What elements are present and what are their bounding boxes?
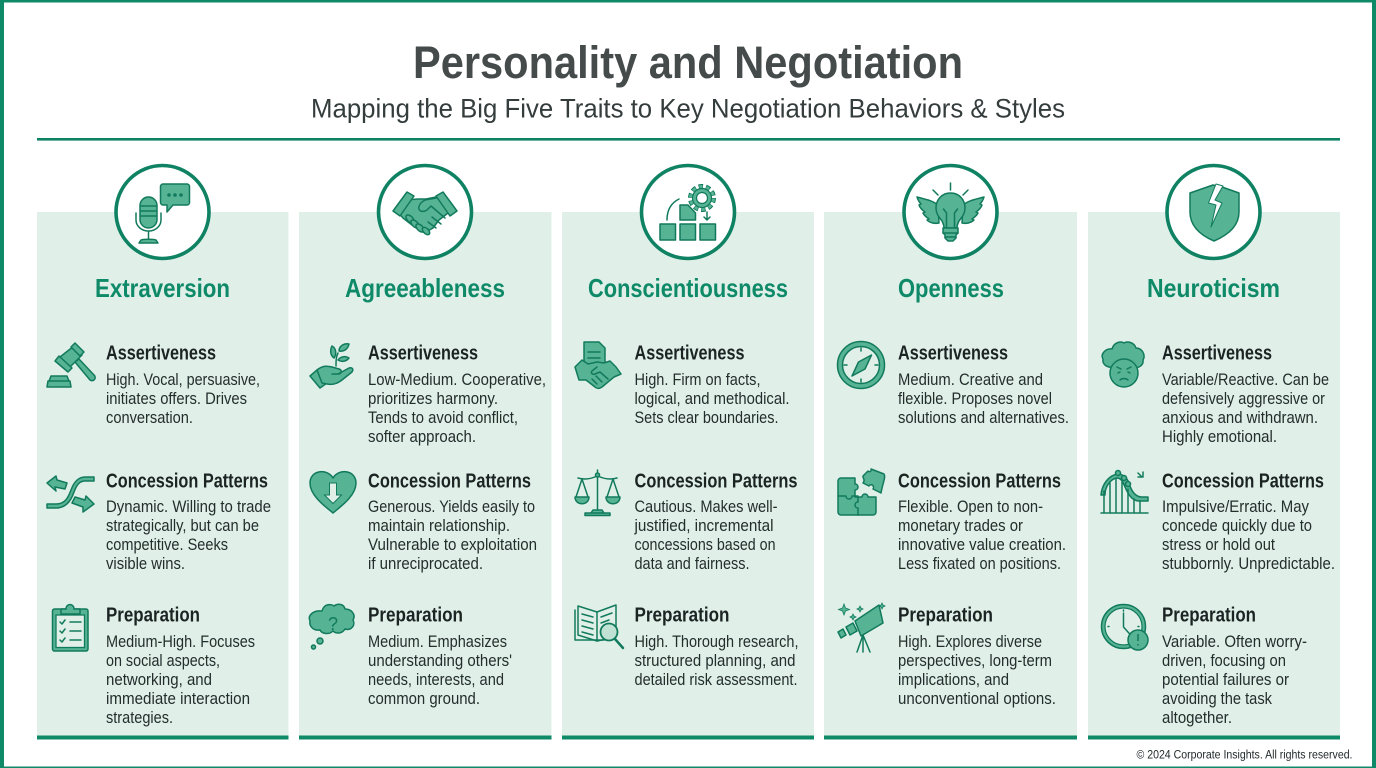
- text block: preparation: strategies.: [106, 709, 173, 727]
- text block: assertiveness: [106, 342, 260, 427]
- icon: handshake: [393, 192, 457, 236]
- text block: preparation: common ground.: [368, 690, 480, 708]
- icon: clock with alert: [1102, 604, 1148, 650]
- text block: assertiveness: conversation.: [106, 409, 193, 427]
- icon: document and handshake: [575, 342, 621, 388]
- icon: cracked shield: [1190, 184, 1239, 241]
- icon: compass: [838, 342, 884, 388]
- text block: concession patterns: maintain relationship.: [368, 517, 510, 535]
- text block: assertiveness: flexible. Proposes novel: [898, 390, 1052, 408]
- text block: concession patterns: Vulnerable to exploitation: [368, 536, 537, 554]
- text block: concession patterns: innovative value creation.: [898, 536, 1066, 554]
- icon: blocks and gear: [660, 187, 716, 240]
- trait heading: Agreeableness: [345, 273, 505, 303]
- text block: assertiveness: Tends to avoid conflict,: [368, 409, 518, 427]
- text block: preparation: networking, and: [106, 671, 212, 689]
- text block: concession patterns: Generous. Yields easily to: [368, 498, 535, 516]
- subtitle: Mapping the Big Five Traits to Key Negotiation Behaviors & Styles: [311, 94, 1065, 124]
- text block: preparation: driven, focusing on: [1162, 652, 1286, 670]
- text block: preparation: High. Thorough research,: [634, 633, 798, 651]
- text block: preparation: potential failures or: [1162, 671, 1289, 689]
- text block: concession patterns: Impulsive/Erratic. May: [1162, 498, 1310, 516]
- panel: Conscientiousness: [562, 166, 814, 740]
- text block: preparation: needs, interests, and: [368, 671, 504, 689]
- icon: heart with down arrow: [310, 472, 356, 513]
- text block: assertiveness: defensively aggressive or: [1162, 390, 1325, 408]
- text block: preparation: Preparation: [368, 604, 463, 626]
- icon: hand with sprout: [310, 344, 353, 388]
- text block: concession patterns: Concession Patterns: [898, 470, 1061, 492]
- text block: preparation: Medium-High. Focuses: [106, 633, 255, 651]
- text block: preparation: perspectives, long-term: [898, 652, 1052, 670]
- text block: concession patterns: justified, incremental: [634, 517, 774, 535]
- text block: preparation: [898, 604, 1056, 708]
- text block: assertiveness: prioritizes harmony.: [368, 390, 498, 408]
- icon: clipboard checklist: [52, 604, 88, 651]
- text block: concession patterns: Less fixated on positions.: [898, 555, 1061, 573]
- text block: concession patterns: Concession Patterns: [1162, 470, 1324, 492]
- text block: preparation: on social aspects,: [106, 652, 220, 670]
- text block: assertiveness: Variable/Reactive. Can be: [1162, 371, 1329, 389]
- text block: preparation: detailed risk assessment.: [634, 671, 798, 689]
- text block: preparation: [1162, 604, 1307, 727]
- text block: assertiveness: Medium. Creative and: [898, 371, 1043, 389]
- text block: assertiveness: Assertiveness: [106, 342, 216, 364]
- icon: open book with magnifier: [575, 605, 623, 648]
- text block: preparation: Preparation: [634, 604, 730, 626]
- trait heading: Openness: [898, 273, 1004, 303]
- text block: concession patterns: [106, 470, 271, 573]
- text block: preparation: Preparation: [898, 604, 993, 626]
- text block: concession patterns: competitive. Seeks: [106, 536, 228, 554]
- panel: Extraversion: [37, 166, 288, 740]
- trait heading: Extraversion: [95, 273, 230, 303]
- text block: assertiveness: Assertiveness: [634, 342, 744, 364]
- panel: Openness: [824, 166, 1077, 740]
- text block: concession patterns: Cautious. Makes well-: [634, 498, 778, 516]
- text block: concession patterns: [634, 470, 798, 573]
- text block: concession patterns: stubbornly. Unpredictable.: [1162, 555, 1335, 573]
- icon: thought cloud with question mark: [309, 604, 354, 649]
- footer copyright: © 2024 Corporate Insights. All rights reserved.: [1136, 750, 1352, 762]
- icon: gavel: [47, 343, 95, 387]
- text block: concession patterns: Flexible. Open to non-: [898, 498, 1043, 516]
- text block: assertiveness: Assertiveness: [368, 342, 478, 364]
- text block: concession patterns: data and fairness.: [634, 555, 750, 573]
- text block: assertiveness: softer approach.: [368, 428, 476, 446]
- text block: assertiveness: High. Firm on facts,: [634, 371, 760, 389]
- panel: Neuroticism: [1088, 166, 1340, 740]
- text block: concession patterns: concessions based on: [634, 536, 776, 554]
- text block: concession patterns: Concession Patterns: [368, 470, 531, 492]
- text block: assertiveness: [1162, 342, 1329, 446]
- icon: crossing arrows: [47, 476, 94, 512]
- trait heading: Conscientiousness: [588, 273, 788, 303]
- text block: concession patterns: Dynamic. Willing to trade: [106, 498, 271, 516]
- text block: assertiveness: [368, 342, 546, 446]
- text block: concession patterns: monetary trades or: [898, 517, 1023, 535]
- text block: preparation: altogether.: [1162, 709, 1232, 727]
- title: Personality and Negotiation: [413, 37, 963, 88]
- text block: concession patterns: stress or hold out: [1162, 536, 1275, 554]
- text block: concession patterns: Concession Patterns: [634, 470, 798, 492]
- text block: preparation: immediate interaction: [106, 690, 250, 708]
- text block: preparation: [368, 604, 512, 708]
- trait heading: Neuroticism: [1147, 273, 1280, 303]
- text block: preparation: High. Explores diverse: [898, 633, 1042, 651]
- text block: assertiveness: High. Vocal, persuasive,: [106, 371, 260, 389]
- icon: roller coaster: [1101, 470, 1148, 513]
- text block: assertiveness: Low-Medium. Cooperative,: [368, 371, 546, 389]
- icon: puzzle pieces: [838, 469, 885, 515]
- panel: Agreeableness: [299, 166, 552, 740]
- icon: thought cloud with question mark: ?: [328, 614, 338, 634]
- icon: telescope and stars: [838, 603, 885, 652]
- text block: concession patterns: visible wins.: [106, 555, 185, 573]
- icon: storm cloud head: [1102, 342, 1144, 387]
- text block: preparation: Preparation: [106, 604, 200, 626]
- text block: assertiveness: logical, and methodical.: [634, 390, 790, 408]
- text block: assertiveness: anxious and withdrawn.: [1162, 409, 1318, 427]
- text block: preparation: unconventional options.: [898, 690, 1056, 708]
- text block: concession patterns: if unreciprocated.: [368, 555, 483, 573]
- text block: assertiveness: solutions and alternatives.: [898, 409, 1069, 427]
- text block: preparation: [106, 604, 255, 727]
- text block: assertiveness: initiates offers. Drives: [106, 390, 247, 408]
- text block: concession patterns: [898, 470, 1066, 573]
- text block: assertiveness: [634, 342, 790, 427]
- text block: preparation: understanding others': [368, 652, 512, 670]
- text block: preparation: implications, and: [898, 671, 1009, 689]
- text block: preparation: [634, 604, 798, 689]
- text block: preparation: structured planning, and: [634, 652, 796, 670]
- text block: assertiveness: Assertiveness: [898, 342, 1008, 364]
- text block: concession patterns: [1162, 470, 1335, 573]
- text block: concession patterns: [368, 470, 537, 573]
- text block: concession patterns: strategically, but can be: [106, 517, 259, 535]
- text block: concession patterns: Concession Patterns: [106, 470, 268, 492]
- text block: concession patterns: concede quickly due to: [1162, 517, 1312, 535]
- icon: microphone and speech bubble: [136, 184, 190, 243]
- text block: assertiveness: Highly emotional.: [1162, 428, 1277, 446]
- icon: winged light bulb: [917, 183, 984, 241]
- text block: assertiveness: Assertiveness: [1162, 342, 1272, 364]
- text block: preparation: Medium. Emphasizes: [368, 633, 507, 651]
- icon: balance scale: [575, 470, 620, 516]
- text block: preparation: Variable. Often worry-: [1162, 633, 1307, 651]
- text block: assertiveness: Sets clear boundaries.: [634, 409, 778, 427]
- text block: preparation: avoiding the task: [1162, 690, 1273, 708]
- text block: assertiveness: [898, 342, 1069, 427]
- text block: preparation: Preparation: [1162, 604, 1256, 626]
